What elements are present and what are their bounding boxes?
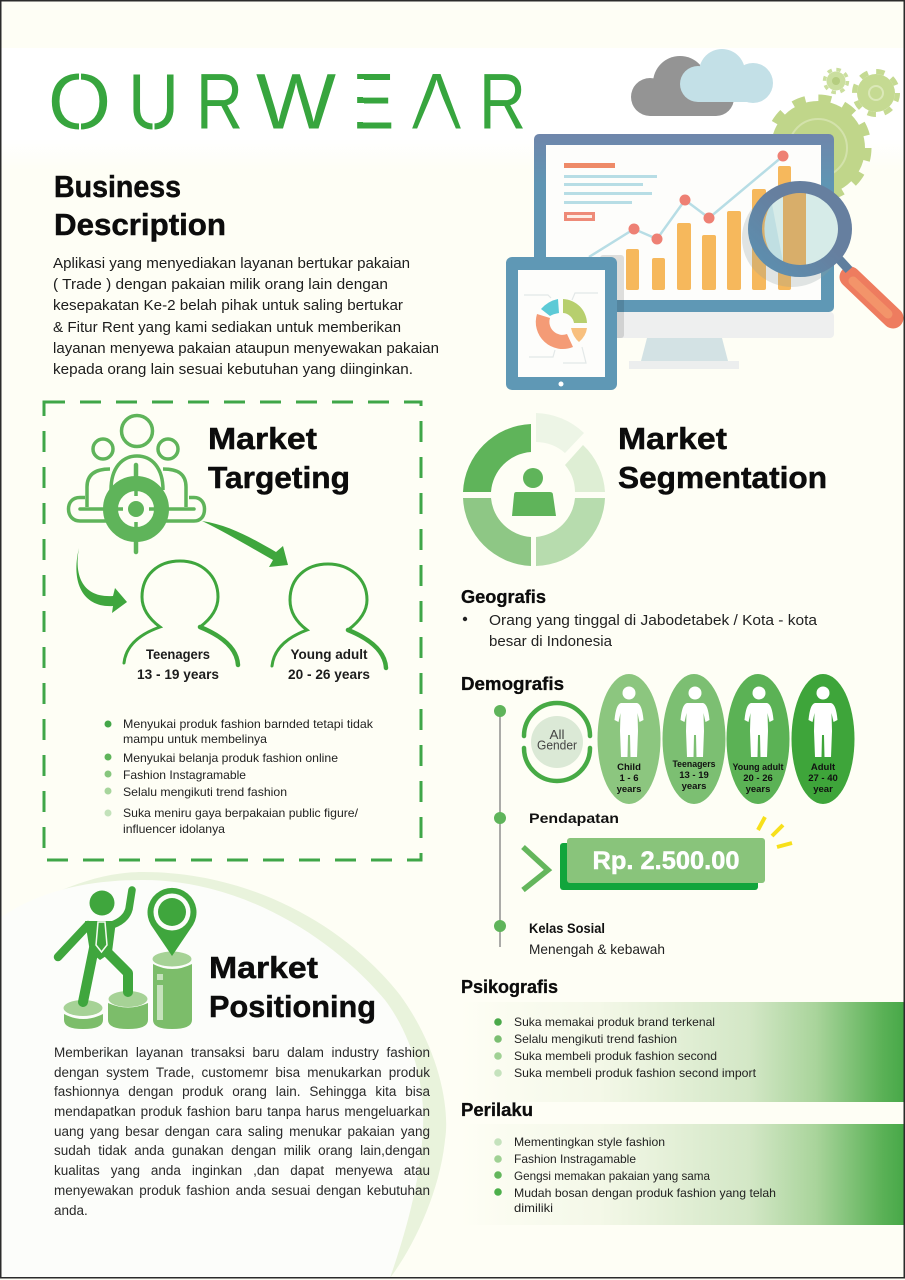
bar chart — [626, 166, 791, 290]
text: market positioning body: anda. — [54, 1202, 88, 1218]
line chart — [589, 150, 788, 257]
section: perilaku: dimiliki — [514, 1201, 553, 1215]
section: demografis — [461, 674, 854, 957]
age group: adult: 27 - 40 — [808, 773, 838, 784]
text: market positioning body: dengan system Trade, customemr bisa menukarkan produk — [54, 1065, 430, 1080]
section: psikografis: Suka membeli produk fashion second import — [514, 1066, 757, 1080]
text: business description body: kesepakatan Ke-2 belah pihak untuk saling bertukar — [53, 297, 403, 314]
icon: young adult outline — [272, 564, 386, 668]
label: young adult: Young adult — [290, 647, 368, 662]
text: market positioning body: sudah tidak anda gunakan dengan milik orang lain,dengan — [54, 1143, 430, 1158]
heading: market positioning — [209, 950, 376, 1024]
text: market positioning body: kualitas yang anda inginkan ,dan dapat menyewa atau — [54, 1163, 430, 1178]
heading: market positioning: Market — [209, 950, 318, 985]
list: target characteristics: Menyukai produk fashion barnded tetapi tidak — [123, 717, 374, 731]
icon: monitor with chart — [534, 134, 834, 369]
text: market positioning body: Memberikan layanan transaksi baru dalam industry fashion — [54, 1045, 430, 1060]
heading: Business Description: Business — [54, 169, 181, 204]
age group: young adult: years — [746, 784, 770, 795]
title: OURWEAR logo: R — [479, 56, 526, 146]
callout: income value — [523, 817, 792, 890]
list: target characteristics: Menyukai belanja produk fashion online — [123, 751, 338, 765]
section: perilaku: Mementingkan style fashion — [514, 1135, 665, 1149]
background: positioning arc — [0, 872, 446, 1278]
section: perilaku: Fashion Instragamable — [514, 1152, 636, 1166]
heading: market targeting — [208, 421, 350, 495]
age group: young adult: 20 - 26 — [743, 773, 773, 784]
icon: positioning figure with pin — [58, 888, 196, 1029]
text: business description body — [53, 255, 439, 378]
heading: market targeting: Targeting — [208, 460, 350, 495]
section: perilaku: Mudah bosan dengan produk fashion yang telah — [514, 1186, 776, 1200]
section: geografis: Geografis — [461, 587, 546, 607]
text: business description body: & Fitur Rent yang kami sediakan untuk memberikan — [53, 319, 401, 336]
title: OURWEAR logo: R — [196, 56, 243, 146]
section: psikografis: Suka membeli produk fashion second — [514, 1049, 717, 1063]
text: business description body: Aplikasi yang menyediakan layanan bertukar pakaian — [53, 255, 410, 272]
heading: market targeting: Market — [208, 421, 317, 456]
donut chart — [524, 293, 598, 363]
age group: adult: Adult — [811, 762, 836, 773]
label: pendapatan: Pendapatan — [529, 810, 619, 826]
label: kelas sosial — [529, 920, 665, 957]
heading: Business Description: Description — [54, 207, 226, 242]
title: OURWEAR logo: A — [412, 56, 461, 146]
label: kelas sosial: Kelas Sosial — [529, 920, 605, 936]
age group: child: years — [617, 784, 641, 795]
icon: teenager outline — [124, 561, 238, 665]
text: business description body: layanan menyewa pakaian ataupun menyewakan pakaian — [53, 340, 439, 357]
badge: all gender: All — [550, 728, 564, 742]
section: demografis: Demografis — [461, 674, 564, 694]
age group: adult — [792, 674, 854, 804]
icon: audience target — [68, 416, 204, 552]
age group: young adult: Young adult — [732, 762, 784, 773]
title: OURWEAR logo: E — [352, 56, 394, 146]
chart text lines — [564, 163, 657, 220]
list: target characteristics — [104, 717, 374, 836]
section: psikografis: Psikografis — [461, 977, 558, 997]
list: target characteristics: Fashion Instagramable — [123, 768, 246, 782]
section: psikografis — [460, 977, 905, 1102]
list: target characteristics: mampu untuk membelinya — [123, 732, 267, 746]
section: geografis: Orang yang tinggal di Jabodetabek / Kota - kota — [489, 612, 818, 629]
title: OURWEAR logo: U — [128, 56, 179, 146]
heading: Business Description — [54, 169, 226, 242]
section: perilaku: Perilaku — [461, 1100, 533, 1120]
arrow: to young adult — [202, 521, 288, 567]
age group: teenagers — [662, 674, 726, 804]
badge: all gender: Gender — [537, 738, 577, 752]
list: target characteristics: influencer idolanya — [123, 822, 225, 836]
text: market positioning body: fashionnya dengan produk orang lain. Sehingga kita bisa — [54, 1084, 430, 1099]
age group: teenagers: Teenagers — [672, 759, 716, 770]
timeline — [494, 705, 506, 947]
age group: teenagers: years — [682, 781, 706, 792]
heading: market segmentation: Market — [618, 421, 727, 456]
arrow: to teenagers — [76, 548, 127, 613]
heading: market segmentation: Segmentation — [618, 460, 827, 495]
section: psikografis: Suka memakai produk brand terkenal — [514, 1015, 715, 1029]
text: market positioning body — [54, 1045, 430, 1218]
text: business description body: ( Trade ) dengan pakaian milik orang lain dengan — [53, 276, 388, 293]
label: teenagers — [137, 647, 219, 682]
label: teenagers: 13 - 19 years — [137, 667, 219, 682]
section: perilaku — [460, 1100, 905, 1225]
age group: child: 1 - 6 — [619, 773, 639, 784]
list: target characteristics: Selalu mengikuti trend fashion — [123, 785, 287, 799]
icon: magnifying glass — [742, 181, 893, 318]
age group: teenagers: 13 - 19 — [679, 770, 709, 781]
list: target characteristics: Suka meniru gaya berpakaian public figure/ — [123, 806, 359, 820]
text: market positioning body: menyewakan produk fashion anda sesuai dengan kebutuhan — [54, 1183, 430, 1198]
callout: income value: Rp. 2.500.00 — [592, 847, 740, 875]
text: market positioning body: uang yang besar dengan cara saling menukar pakaian yang — [54, 1124, 430, 1139]
section: perilaku: Gengsi memakan pakaian yang sama — [514, 1169, 710, 1183]
title: OURWEAR logo: W — [256, 56, 336, 146]
icon: tablet with donut chart — [506, 250, 624, 390]
heading: market positioning: Positioning — [209, 989, 376, 1024]
age group: young adult — [726, 674, 790, 804]
icon: gears — [768, 70, 898, 198]
icon: segmentation donut — [463, 413, 605, 566]
age group: child: Child — [617, 762, 641, 773]
age group: adult: year — [813, 784, 833, 795]
label: young adult — [288, 647, 370, 682]
section: psikografis: Selalu mengikuti trend fashion — [514, 1032, 677, 1046]
label: young adult: 20 - 26 years — [288, 667, 370, 682]
badge: all gender — [524, 703, 590, 781]
label: kelas sosial: Menengah & kebawah — [529, 941, 665, 957]
heading: market segmentation — [618, 421, 827, 495]
title: OURWEAR logo: O — [48, 56, 111, 146]
label: teenagers: Teenagers — [146, 647, 210, 662]
text: market positioning body: mendapatkan produk fashion baru tanpa harus mengeluarkan — [54, 1104, 430, 1119]
section: geografis — [461, 587, 818, 650]
age group: child — [598, 674, 660, 804]
title: OURWEAR logo — [48, 56, 526, 146]
panel: market targeting — [44, 402, 421, 860]
icon: clouds — [631, 49, 773, 116]
text: business description body: kepada orang lain sesuai kebutuhan yang diinginkan. — [53, 361, 413, 378]
section: geografis: besar di Indonesia — [489, 633, 613, 650]
